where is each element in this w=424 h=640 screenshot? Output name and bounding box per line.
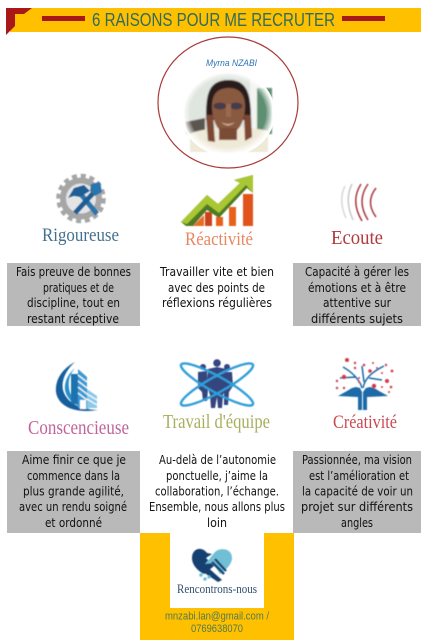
panel: Rigoureuse text: restant réceptive: [27, 311, 119, 326]
panel: Rigoureuse text: [7, 263, 140, 326]
left title bar: [42, 16, 85, 21]
panel: Conscencieuse text: plus grande agilité,: [23, 484, 124, 498]
panel: Créativité text: [293, 451, 421, 533]
contact details: 0769638070: [191, 623, 243, 635]
label: Réactivité: Réactivité: [185, 230, 253, 250]
label: Conscencieuse: Conscencieuse: [28, 418, 129, 439]
contact details: mnzabi.lan@gmail.com /: [165, 610, 270, 622]
icon: team with orbits: [177, 358, 257, 411]
icon: building in crescent: [56, 362, 98, 411]
text block: Réactivité: avec des points de: [168, 280, 265, 295]
panel: Ecoute text: [293, 263, 421, 326]
panel: Ecoute text: attentive sur: [323, 295, 392, 310]
portrait photo: [184, 73, 272, 153]
name: Myrna NZABI: [206, 58, 257, 69]
text block: Travail d'équipe: ponctuelle, j’aime la: [166, 468, 268, 483]
contact details: [165, 610, 270, 635]
text block: Travail d'équipe: loin: [207, 515, 227, 530]
icon: handshake heart: [192, 549, 232, 582]
label: Ecoute: Ecoute: [331, 228, 383, 249]
label: Rigoureuse: Rigoureuse: [42, 226, 119, 246]
label: Créativité: Créativité: [333, 413, 397, 433]
panel: Créativité text: projet sur différents: [301, 499, 413, 514]
panel: Créativité text: angles: [341, 515, 373, 530]
panel: Conscencieuse text: avec un rendu soigné: [19, 499, 127, 514]
icon: growth chart arrow: [181, 175, 253, 226]
portrait circle: [158, 37, 298, 168]
text block: Réactivité: Travailler vite et bien: [159, 264, 274, 279]
panel: Rigoureuse text: pratiques et de: [43, 280, 114, 295]
text block: Réactivité: réflexions régulières: [162, 295, 272, 310]
icon: tree hands: [336, 358, 393, 410]
panel: Conscencieuse text: et ordonné: [45, 515, 102, 530]
header banner: [6, 8, 421, 35]
label: Travail d'équipe: Travail d'équipe: [163, 412, 270, 433]
text block: Travail d'équipe: [149, 452, 285, 530]
label: Rencontrons-nous: Rencontrons-nous: [177, 582, 257, 596]
panel: Conscencieuse text: [7, 451, 140, 533]
text block: Travail d'équipe: Ensemble, nous allons plus: [149, 499, 285, 514]
panel: Rigoureuse text: Fais preuve de bonnes: [16, 264, 131, 279]
title: 6 RAISONS POUR ME RECRUTER: [92, 9, 335, 30]
text block: Réactivité: [159, 264, 274, 310]
icon: gear with tools: [58, 176, 104, 221]
panel: Rigoureuse text: discipline, tout en: [27, 295, 120, 310]
panel: Ecoute text: différents sujets: [311, 311, 403, 326]
panel: Conscencieuse text: Aime finir ce que je: [22, 452, 126, 467]
panel: Ecoute text: émotions et à être: [308, 280, 406, 295]
text block: Travail d'équipe: collaboration, l’échange.: [155, 484, 279, 498]
panel: contact: [140, 533, 294, 640]
text block: Travail d'équipe: Au-delà de l’autonomie: [159, 452, 276, 467]
right title bar: [342, 16, 385, 21]
icon: sound waves: [342, 184, 376, 221]
icon: red corner flag: [6, 8, 32, 35]
panel: Conscencieuse text: commence dans la: [27, 468, 120, 483]
